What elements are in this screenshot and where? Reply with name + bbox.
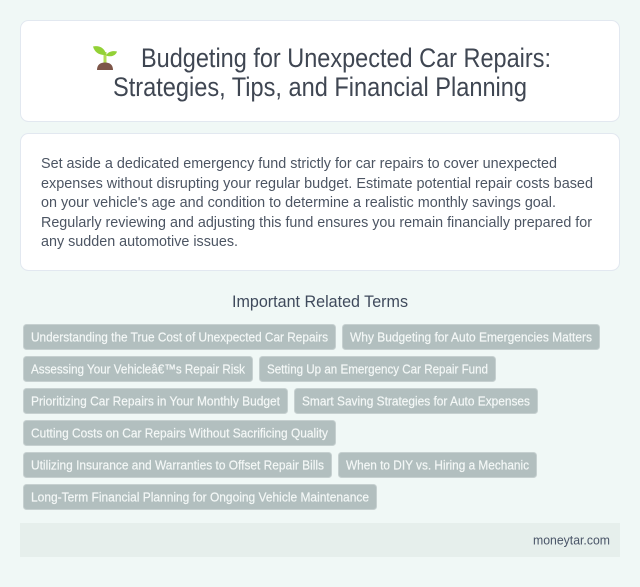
chip: why budgeting matters [342, 324, 600, 350]
heading: title: Budgeting for Unexpected Car Repairs: [141, 43, 551, 73]
chip: smart saving: Smart Saving Strategies for Auto Expenses [302, 394, 530, 408]
text block: summary paragraph [41, 155, 593, 250]
heading: title [113, 43, 551, 102]
chip: understanding true cost: Understanding the True Cost of Unexpected Car Repairs [31, 330, 328, 344]
text block: summary paragraph: Set aside a dedicated emergency fund strictly for car repairs to cover unexpected [41, 155, 557, 172]
chip: prioritizing repairs [24, 388, 288, 414]
chip: emergency fund: Setting Up an Emergency Car Repair Fund [267, 362, 488, 376]
heading: title: Strategies, Tips, and Financial Planning [113, 72, 527, 102]
chip: assessing repair risk [24, 356, 252, 382]
chip: insurance and warranties [24, 452, 332, 478]
chip: smart saving [294, 388, 538, 414]
icon: seedling [93, 46, 117, 70]
chip: cutting costs [24, 420, 336, 446]
text block: summary paragraph: any sudden automotive issues. [41, 233, 238, 250]
panel: title card [20, 20, 620, 122]
chip: long-term planning [24, 484, 376, 510]
chip: understanding true cost [24, 324, 336, 350]
text block: summary paragraph: Regularly reviewing and adjusting this fund ensures you remain financially prepared for [41, 214, 592, 231]
text block: summary paragraph: expenses without disrupting your regular budget. Estimate potential repair costs based [41, 175, 593, 192]
chip: emergency fund [260, 356, 496, 382]
chip: insurance and warranties: Utilizing Insurance and Warranties to Offset Repair Bills [31, 458, 324, 472]
footer: site name: moneytar.com [533, 532, 610, 548]
text block: summary paragraph: on your vehicle's age and condition to determine a realistic monthly savings goal. [41, 194, 556, 211]
panel: related term chips [24, 324, 600, 510]
chip: DIY vs mechanic [338, 452, 536, 478]
footer bar [20, 523, 620, 557]
chip: long-term planning: Long-Term Financial Planning for Ongoing Vehicle Maintenance [31, 490, 369, 504]
heading: important related terms: Important Related Terms [232, 292, 408, 311]
chip: assessing repair risk: Assessing Your Vehicleâ€™s Repair Risk [31, 362, 245, 376]
chip: cutting costs: Cutting Costs on Car Repairs Without Sacrificing Quality [31, 426, 328, 440]
chip: why budgeting matters: Why Budgeting for Auto Emergencies Matters [350, 330, 592, 344]
panel: summary card [20, 134, 620, 270]
chip: DIY vs mechanic: When to DIY vs. Hiring a Mechanic [346, 458, 529, 472]
chip: prioritizing repairs: Prioritizing Car Repairs in Your Monthly Budget [31, 394, 280, 408]
